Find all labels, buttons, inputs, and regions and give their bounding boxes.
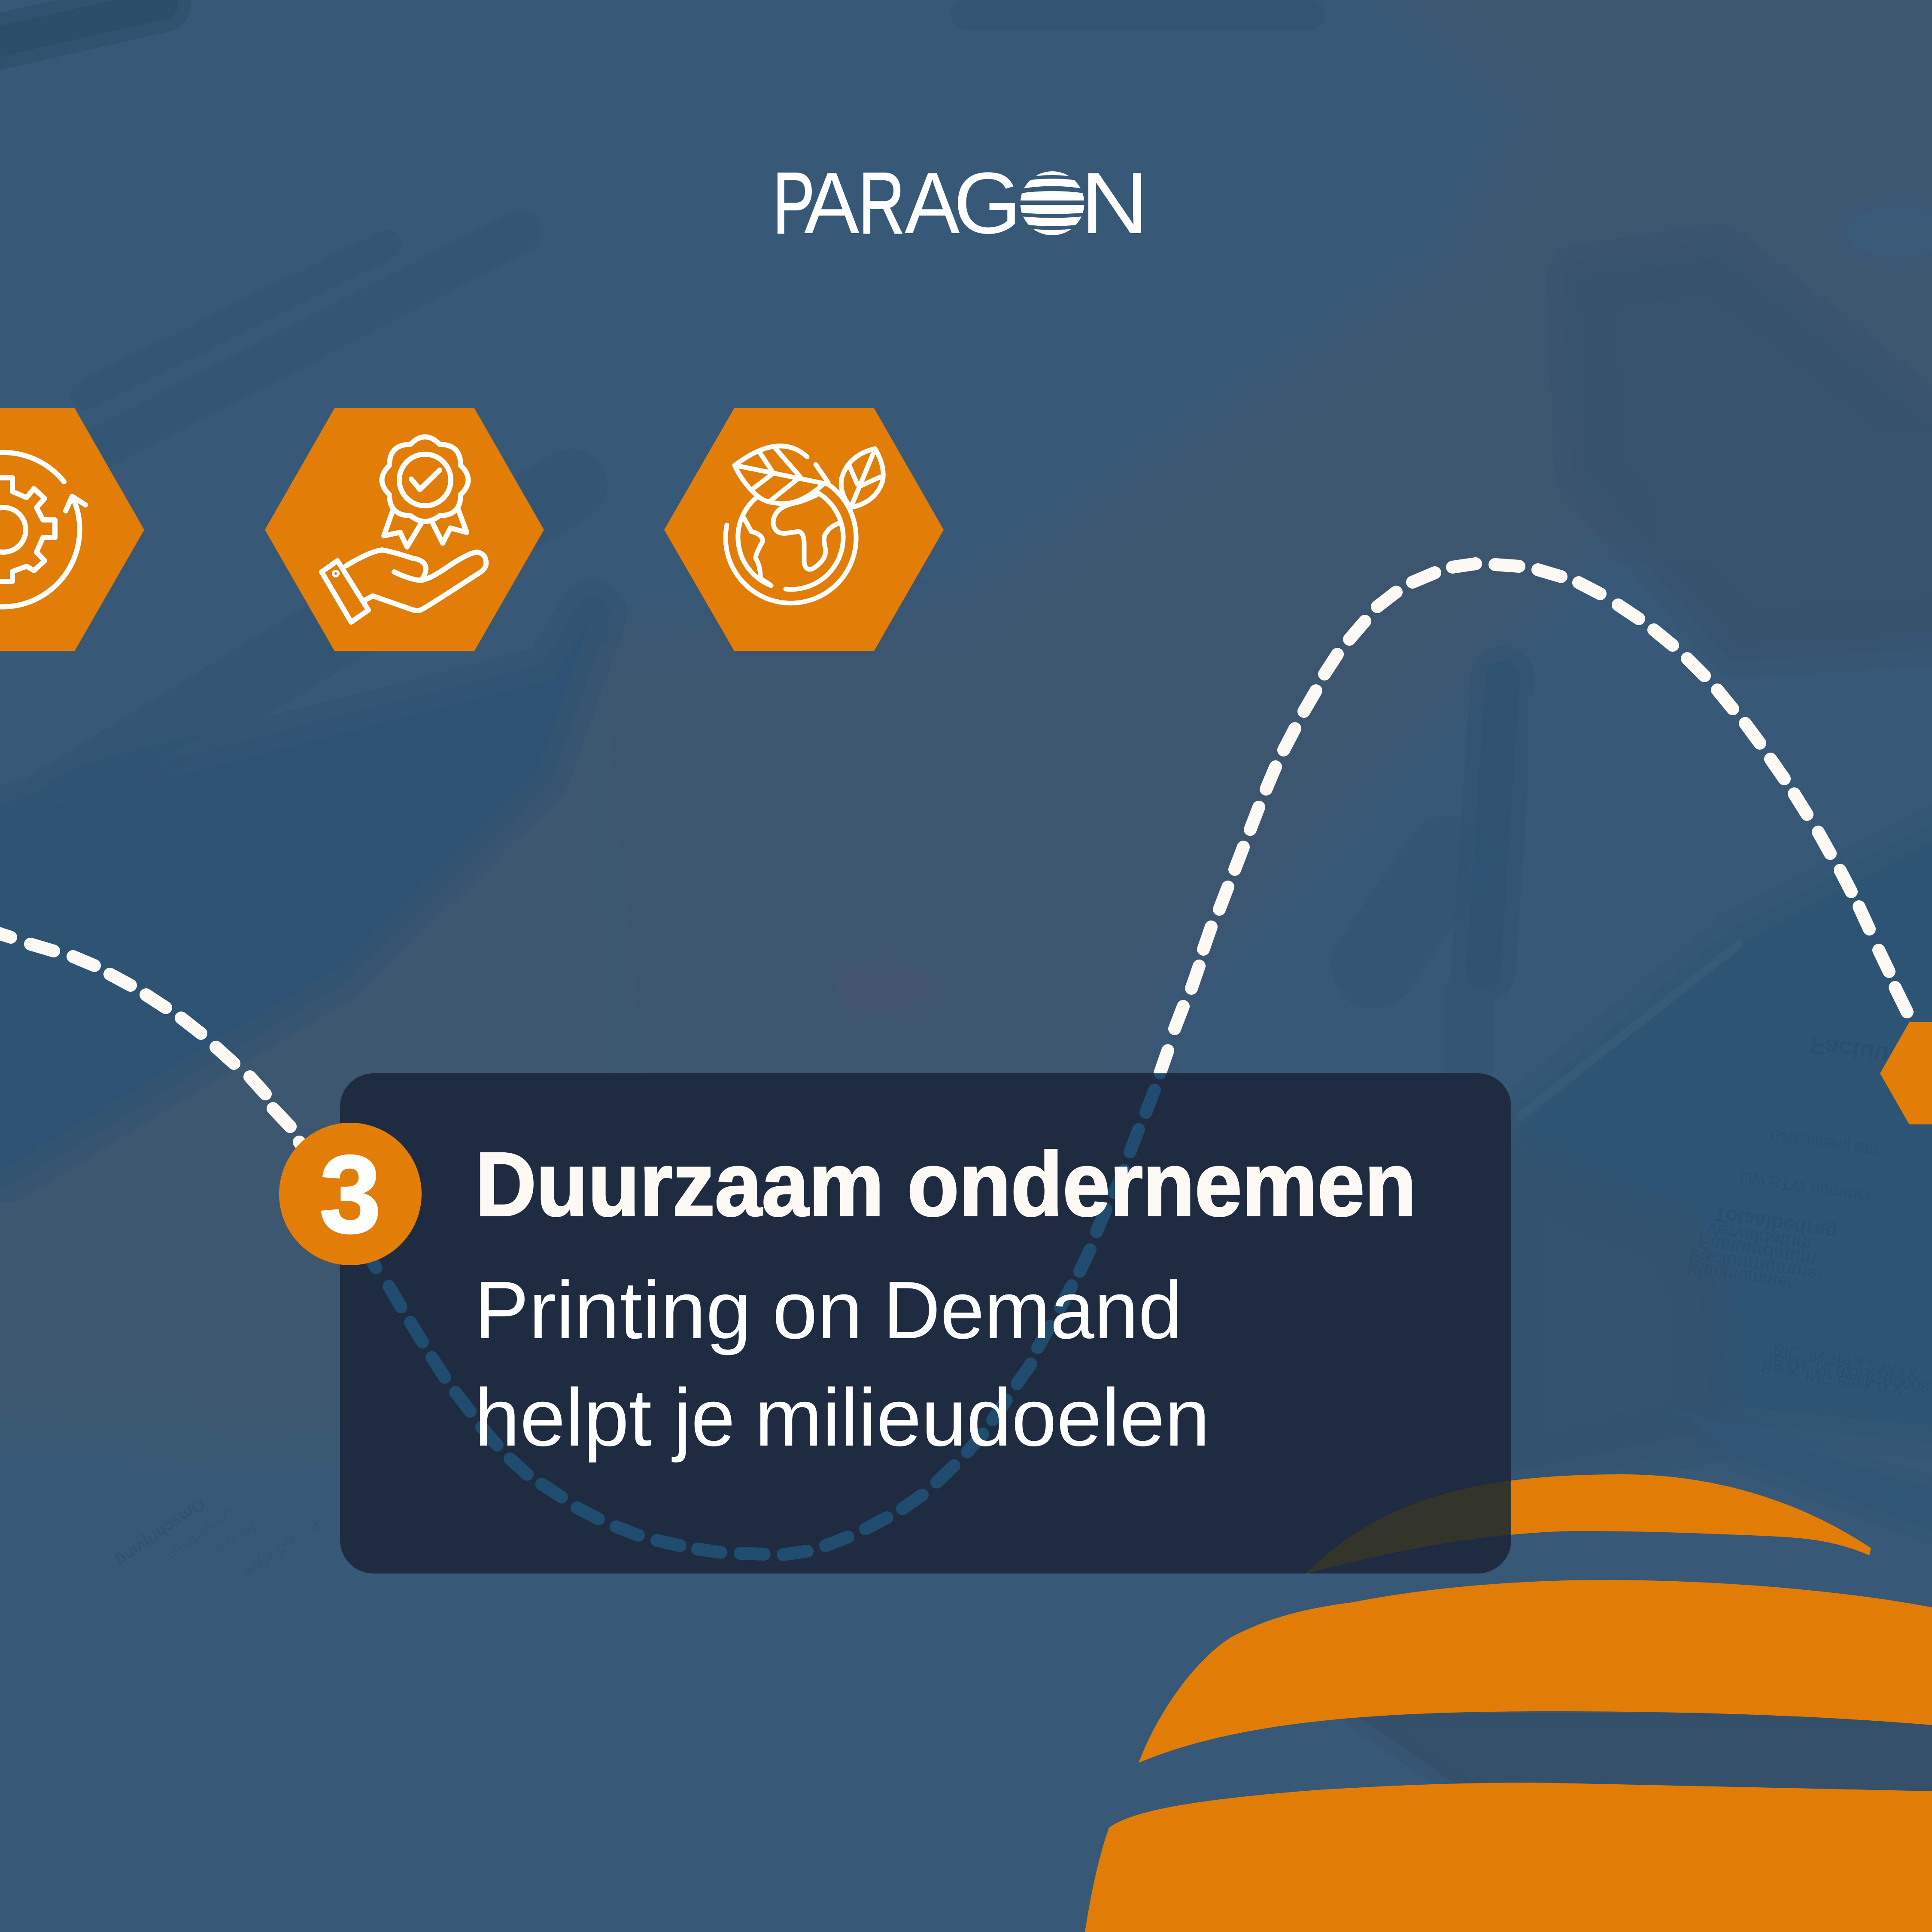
faint mirrored invoice text in the photo: Productietype xyxy=(240,1517,323,1582)
number badge: 3 xyxy=(279,1123,422,1265)
body text: on xyxy=(772,1265,863,1356)
faint mirrored invoice text in the photo: Factuurnummer: xyxy=(1688,1245,1831,1287)
dashed route line (blue, inside the card) xyxy=(363,1051,1168,1555)
faint mirrored invoice text in the photo: Factuurdatum: xyxy=(1697,1231,1823,1271)
body text: helpt xyxy=(474,1372,652,1463)
faint mirrored invoice text in the photo: IBAN: NL82INGB0008 xyxy=(1767,1350,1931,1396)
faint mirrored invoice text in the photo: Uw BTW nummer: xyxy=(1739,1167,1877,1208)
faint mirrored invoice text in the photo: Omschrijving xyxy=(112,1495,208,1570)
background: flat interior areas of the photo xyxy=(0,0,1932,1387)
faint mirrored invoice text in the photo: Bank: ING Bank N.V. xyxy=(1760,1358,1907,1401)
hexagon: quality medal on hand icon xyxy=(265,408,544,651)
faint mirrored invoice text in the photo xyxy=(112,1031,1931,1582)
logo: PARAGON: N xyxy=(1081,154,1148,252)
body text: Printing xyxy=(474,1265,751,1356)
number badge: 3: 3 xyxy=(320,1133,381,1256)
icon: gear with circular arrow xyxy=(0,453,85,607)
faint mirrored invoice text in the photo: Ter post xyxy=(209,1517,261,1560)
faint mirrored invoice text in the photo: BIC: INGBNL2AXXX xyxy=(1772,1340,1919,1383)
faint mirrored invoice text in the photo: Totaalbedrag xyxy=(1713,1203,1838,1245)
heading: Duurzaam xyxy=(475,1133,884,1235)
hexagon: earth and leaves icon xyxy=(664,408,944,651)
body text: je xyxy=(671,1372,735,1463)
faint mirrored invoice text in the photo: Vervaldatum: xyxy=(1704,1218,1819,1256)
logo globe replacing the letter O xyxy=(1020,171,1084,235)
faint mirrored invoice text in the photo: Factuur xyxy=(1809,1031,1900,1070)
icon: medal above open hand xyxy=(322,437,486,622)
faint mirrored invoice text in the photo: Gefactureerd aan: xyxy=(1769,1125,1882,1162)
bottom-right orange globe stripes xyxy=(1085,1474,1932,1932)
faint mirrored invoice text in the photo: Converteren xyxy=(164,1504,239,1564)
logo: PARAGON: P xyxy=(773,155,814,252)
hexagon: gear and cycle icon (cropped at left edge) xyxy=(0,408,144,651)
logo: PARAGON: R xyxy=(859,154,905,252)
body text xyxy=(474,1265,1210,1463)
heading: ondernemen xyxy=(907,1133,1416,1235)
panel: dark text card xyxy=(340,1073,1511,1574)
body text: Demand xyxy=(883,1265,1182,1356)
logo: PARAGON xyxy=(777,171,1141,235)
body text: milieudoelen xyxy=(755,1372,1210,1463)
dashed route line (white, outside the card) xyxy=(0,564,1907,1163)
orange stripe seen through the card xyxy=(1306,1480,1511,1574)
faint mirrored invoice text in the photo: Klantnummer: xyxy=(1686,1258,1799,1295)
icon: globe with leaves xyxy=(726,446,883,603)
heading xyxy=(475,1133,1416,1235)
hexagon: next step, cropped at right edge xyxy=(1880,1022,1932,1124)
logo: PARAGON: A xyxy=(905,154,960,252)
logo: PARAGON: A xyxy=(804,154,860,252)
logo: PARAGON: G xyxy=(954,155,1021,252)
